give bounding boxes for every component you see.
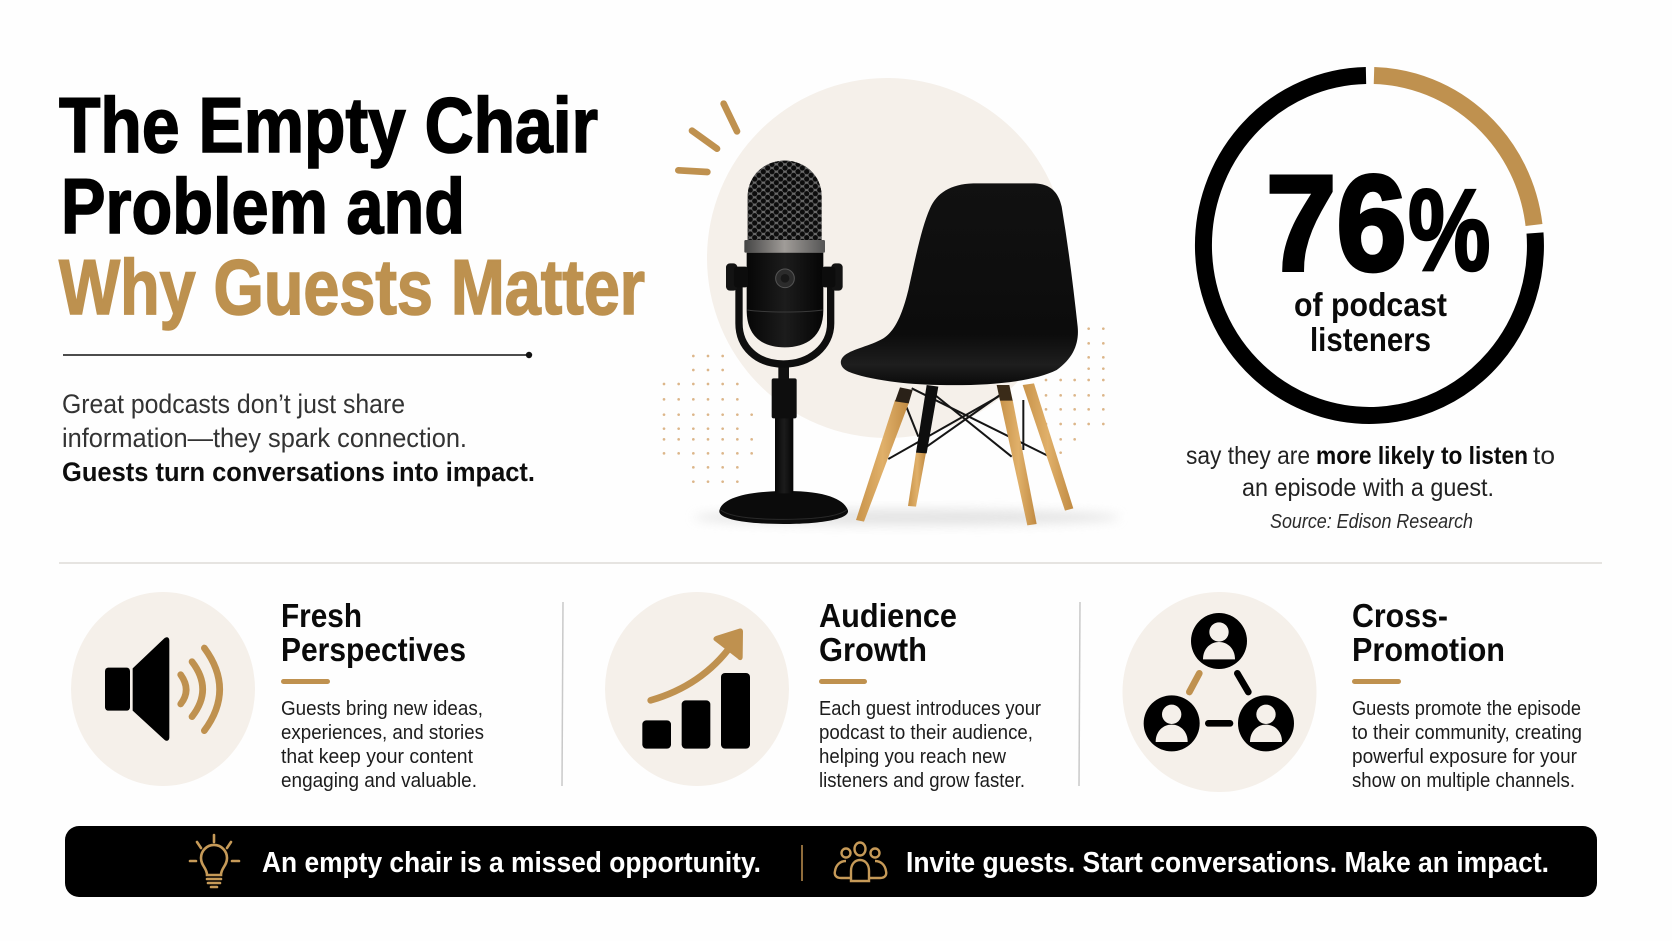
title: Problem and bbox=[61, 162, 465, 250]
heading: Growth bbox=[819, 631, 927, 668]
stat label inside ring: listeners bbox=[1310, 321, 1431, 358]
stat description bbox=[1186, 442, 1555, 502]
stat ring: 76 percent bbox=[1203, 76, 1535, 415]
stat label inside ring bbox=[1294, 286, 1447, 358]
big stat number bbox=[1266, 147, 1491, 299]
panel: audience growth bbox=[605, 592, 1041, 792]
dot pattern: left bbox=[663, 355, 753, 483]
title underline with end dot bbox=[63, 352, 532, 358]
icon: growth chart bbox=[605, 592, 789, 786]
banner bbox=[65, 826, 1597, 897]
icon: light bulb bbox=[190, 835, 239, 887]
body text: powerful exposure for your bbox=[1352, 746, 1577, 768]
stat label inside ring: of podcast bbox=[1294, 286, 1447, 323]
panel: fresh perspectives bbox=[71, 592, 484, 792]
body text: Each guest introduces your bbox=[819, 698, 1041, 720]
big stat number: 76 bbox=[1266, 147, 1407, 299]
icon: speaker bbox=[71, 592, 255, 786]
heading: Promotion bbox=[1352, 631, 1505, 668]
body text: that keep your content bbox=[281, 746, 473, 768]
body text: engaging and valuable. bbox=[281, 770, 477, 792]
heading: Cross- bbox=[1352, 597, 1448, 634]
heading bbox=[1352, 597, 1505, 668]
icon: group of people bbox=[835, 842, 886, 881]
body text: to their community, creating bbox=[1352, 722, 1582, 744]
stat description: say they are bbox=[1186, 442, 1310, 470]
title bbox=[59, 81, 645, 331]
floor shadow bbox=[693, 509, 1120, 525]
heading: Audience bbox=[819, 597, 957, 634]
sound rays bbox=[678, 104, 737, 172]
body text bbox=[819, 698, 1041, 792]
icon: connected people bbox=[1122, 592, 1316, 792]
heading: Fresh bbox=[281, 597, 362, 634]
accent bar bbox=[819, 679, 867, 684]
intro paragraph: information—they spark connection. bbox=[62, 423, 467, 453]
chair bbox=[841, 183, 1078, 525]
stat description: an episode with a guest. bbox=[1242, 474, 1494, 502]
title: The Empty Chair bbox=[59, 81, 598, 169]
illustration: microphone and empty chair bbox=[663, 104, 1120, 525]
heading bbox=[281, 597, 466, 668]
body text: experiences, and stories bbox=[281, 722, 484, 744]
body text: Guests bring new ideas, bbox=[281, 698, 483, 720]
body text: helping you reach new bbox=[819, 746, 1007, 768]
body text: listeners and grow faster. bbox=[819, 770, 1025, 792]
accent bar bbox=[281, 679, 330, 684]
banner text right: Invite guests. Start conversations. Make an impact. bbox=[906, 847, 1549, 879]
body text: show on multiple channels. bbox=[1352, 770, 1575, 792]
intro paragraph bbox=[62, 389, 535, 487]
body text bbox=[281, 698, 484, 792]
banner text left: An empty chair is a missed opportunity. bbox=[262, 847, 761, 879]
intro paragraph: Guests turn conversations into impact. bbox=[62, 457, 535, 487]
heading bbox=[819, 597, 957, 668]
microphone bbox=[719, 160, 848, 524]
title: Why Guests Matter bbox=[59, 243, 645, 331]
source note: Source: Edison Research bbox=[1270, 511, 1473, 533]
stat description: more likely to listen bbox=[1316, 442, 1528, 470]
stat description: to bbox=[1533, 442, 1555, 470]
body text: Guests promote the episode bbox=[1352, 698, 1581, 720]
accent bar bbox=[1352, 679, 1401, 684]
body text bbox=[1352, 698, 1582, 792]
body text: podcast to their audience, bbox=[819, 722, 1033, 744]
section divider bbox=[59, 562, 1602, 564]
dot pattern: right bbox=[1045, 327, 1105, 454]
intro paragraph: Great podcasts don’t just share bbox=[62, 389, 405, 419]
panel: cross-promotion bbox=[1122, 592, 1582, 792]
heading: Perspectives bbox=[281, 631, 466, 668]
background circle behind microphone and chair bbox=[707, 78, 1067, 438]
big stat number: % bbox=[1408, 166, 1491, 295]
